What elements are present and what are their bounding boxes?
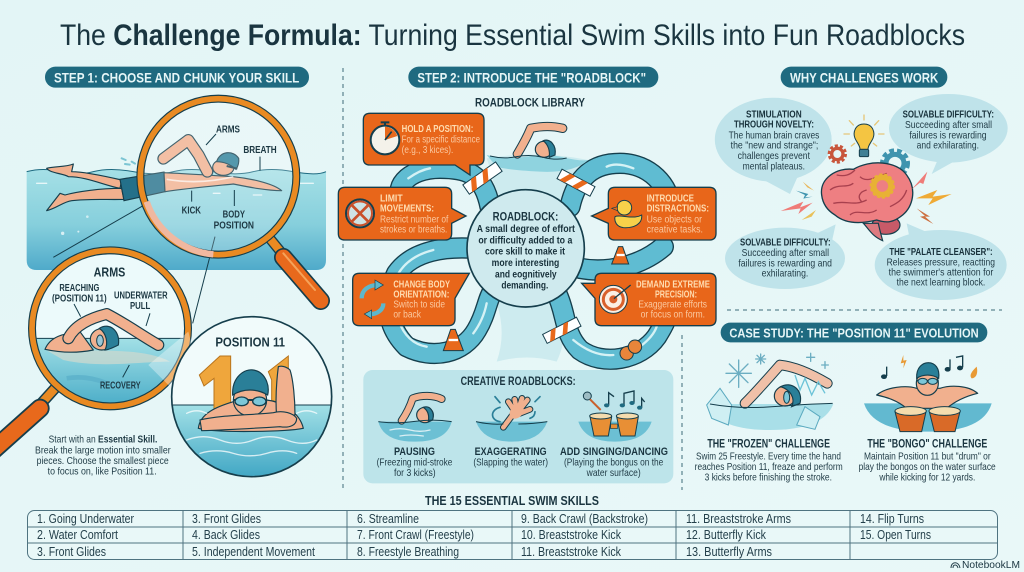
bubble: stimulation through novelty: The human brain craves [729,130,819,141]
heading: step 2 [408,67,658,88]
arms magnifier: ARMS [94,265,125,280]
callout: change body orientation [353,273,469,326]
icon: brain [821,163,913,241]
bubble: solvable difficulty bottom [725,224,845,289]
panel: step 1 choose and chunk [0,67,333,478]
central roadblock definition [467,190,584,307]
handle of large magnifier [268,237,321,301]
bubble: solvable difficulty bottom: exhilarating. [762,269,808,280]
barricades [463,162,595,343]
table: swim skills: 14. Flip Turns [860,512,924,526]
creative roadblocks heading: CREATIVE ROADBLOCKS: [461,375,576,388]
text: bongo challenge: THE "BONGO" CHALLENGE [867,437,988,450]
bubble: stimulation through novelty: the "new and strange"; [731,141,818,152]
callout: change body orientation: CHANGE BODY [393,280,450,291]
connector wedge [148,332,213,430]
arms magnifier: PULL [130,301,150,312]
icon: bongos and notes [578,391,652,442]
bubble: solvable difficulty bottom: failures is rewarding and [738,258,832,269]
callout: hold a position: HOLD A POSITION: [402,124,473,135]
icon: gears [829,146,908,176]
text: bongo challenge: play the bongos on the water surface [859,462,996,473]
bubble: stimulation through novelty [715,98,832,194]
table: swim skills: 11. Breaststroke Kick [521,545,622,559]
callout: introduce distractions: Use objects or [647,214,703,225]
heading: step 2: STEP 2: INTRODUCE THE "ROADBLOCK" [417,70,646,86]
arms magnifier: (POSITION 11) [52,293,107,304]
swimmer [37,140,313,235]
illustration: frozen swimmer [707,353,833,430]
callout: change body orientation: or back [393,310,421,321]
labels: exaggerating: EXAGGERATING [475,446,547,458]
callout: demand extreme precision: Exaggerate efforts [638,300,707,311]
icon: exaggerating hand [476,397,547,442]
labels: pausing: for 3 kicks) [394,468,436,479]
table: swim skills: 11. Breaststroke Arms [686,512,791,526]
callout: change body orientation: Switch to side [393,300,445,311]
callout: introduce distractions: INTRODUCE [647,194,694,205]
large magnifier lens: ARMS [216,124,240,135]
text: bongo challenge: Maintain Position 11 but "drum" or [864,452,991,463]
text: frozen challenge: 3 kicks before finishing the stroke. [705,472,832,483]
bubble: solvable difficulty top: Succeeding after small [905,120,992,131]
bubble: solvable difficulty top: failures is rewarding [909,130,987,141]
text: frozen challenge: Swim 25 Freestyle. Every time the hand [696,452,841,463]
text: frozen challenge: reaches Position 11, freaze and perform [695,462,843,473]
callout: introduce distractions: creative tasks. [647,224,703,235]
table: swim skills: 9. Back Crawl (Backstroke) [521,512,648,526]
bubble: palate cleanser: the next learning block. [897,278,985,289]
central roadblock definition: or difficulty added to a [478,235,573,246]
table: swim skills: 1. Going Underwater [37,512,134,526]
callout: introduce distractions: DISTRACTIONS: [647,204,709,215]
callout: demand extreme precision [582,273,716,326]
labels: add singing/dancing: water surface) [586,468,641,479]
bubble: stimulation through novelty: mental plateaus. [743,161,805,172]
labels: pausing [377,446,453,479]
panel: creative roadblocks [363,370,673,483]
central roadblock definition: more interesting [492,258,559,269]
text: bongo challenge: while kicking for 12 yards. [879,472,975,483]
panel: why challenges work [715,67,1008,300]
callout: limit movements: MOVEMENTS: [380,204,434,215]
callout: introduce distractions [592,187,716,240]
table: swim skills: 5. Independent Movement [192,545,315,559]
icon: pausing swimmer [378,396,452,442]
table: swim skills: 8. Freestyle Breathing [357,545,459,559]
table: swim skills: 7. Front Crawl (Freestyle) [357,528,474,542]
callout: change body orientation: ORIENTATION: [393,290,449,301]
bubble: palate cleanser: the swimmer's attention for [889,267,994,278]
step 1 body text: Start with an Essential Skill. [49,435,157,446]
step 1 body text [35,435,171,478]
heading: why challenges work [781,67,947,88]
text: frozen challenge [695,437,843,483]
callout: hold a position [363,113,484,175]
subheading: roadblock library: ROADBLOCK LIBRARY [475,96,585,110]
large magnifier lens: BREATH [243,145,277,156]
heading: case study [721,323,987,342]
table: swim skills: 13. Butterfly Arms [686,545,772,559]
large magnifier lens [140,99,296,255]
position 11 circle [170,317,333,478]
table: swim skills: 3. Front Glides [192,512,261,526]
step 1 body text: pieces. Choose the smallest piece [37,456,169,467]
central roadblock definition: core skill to make it [485,247,565,258]
table: swim skills: 3. Front Glides [37,545,106,559]
text: bongo challenge [859,437,996,483]
labels: add singing/dancing: ADD SINGING/DANCING [560,446,668,458]
callout: demand extreme precision: PRECISION: [655,290,697,301]
looping tube track [389,163,670,359]
table: swim skills [28,510,998,560]
labels: exaggerating [473,446,548,469]
text: frozen challenge: THE "FROZEN" CHALLENGE [707,437,830,450]
callout: limit movements: Restrict number of [380,214,449,225]
central water pool [487,155,588,362]
table: swim skills: 6. Streamline [357,512,419,526]
callout: limit movements: LIMIT [380,194,403,205]
bubble: palate cleanser: THE "PALATE CLEANSER": [889,247,993,258]
callout: demand extreme precision: DEMAND EXTREME [636,280,710,291]
labels: exaggerating: (Slapping the water) [473,458,548,469]
labels: pausing: (Freezing mid-stroke [377,458,453,469]
bubble: solvable difficulty top [889,94,1008,174]
panel: case study [695,323,996,483]
icon: lightbulb [844,115,884,157]
central roadblock definition: and eognitively [495,269,557,280]
arms magnifier [0,250,190,450]
bubble: solvable difficulty top: and exhilarating. [917,141,979,152]
step 1 body text: to focus on, like Position 11. [48,467,157,478]
table: swim skills: 4. Back Glides [192,528,260,542]
bubble: solvable difficulty bottom: Succeeding after small [742,248,829,259]
table: swim skills: 10. Breaststroke Kick [521,528,622,542]
bubble: solvable difficulty bottom: SOLVABLE DIFFICULTY: [740,238,831,249]
labels: add singing/dancing: (Playing the bongus on the [564,458,664,469]
central roadblock definition: ROADBLOCK: [493,210,558,224]
icon: lightning bolts [781,172,952,224]
callout: hold a position: (e.g., 3 kices). [402,145,453,156]
heading: step 1: STEP 1: CHOOSE AND CHUNK YOUR SKILL [54,70,300,86]
sight lines [53,202,215,323]
traffic cones [443,247,642,360]
heading: why challenges work: WHY CHALLENGES WORK [790,70,938,86]
bubble: palate cleanser [875,223,1007,300]
bubble: stimulation through novelty: challenges prevent [738,151,810,162]
large magnifier lens: BODY [223,210,245,221]
large magnifier lens: KICK [182,205,201,216]
title: The Challenge Formula: Turning Essential Swim Skills into Fun Roadblocks [60,19,965,52]
heading: step 1 [45,67,309,88]
position 11 circle: POSITION 11 [215,335,285,350]
heading: 15 essential swim skills: THE 15 ESSENTIAL SWIM SKILLS [425,494,599,508]
table: swim skills: 12. Butterfly Kick [686,528,767,542]
callout: hold a position: For a specific distance [402,134,480,145]
table: swim skills: 15. Open Turns [860,528,931,542]
table: swim skills: 2. Water Comfort [37,528,118,542]
notebooklm mark: NotebookLM [962,559,1020,571]
labels: pausing: PAUSING [394,446,435,458]
bubble: solvable difficulty top: SOLVABLE DIFFICULTY: [903,109,994,120]
bubble: stimulation through novelty: STIMULATION [746,109,802,120]
step 1 body text: Break the large motion into smaller [35,445,171,456]
central roadblock definition: A small degree of effort [477,224,575,235]
large magnifier lens: POSITION [214,220,254,231]
bubble: palate cleanser: Releases pressure, reactting [887,257,995,268]
arms magnifier: UNDERWATER [114,291,168,302]
arms magnifier: REACHING [59,283,99,294]
arms magnifier: RECOVERY [100,380,141,391]
labels: add singing/dancing [560,446,668,479]
callout: demand extreme precision: or focus on form. [641,310,705,321]
pool water [27,169,326,270]
central roadblock definition: demanding. [501,281,548,292]
bubble: stimulation through novelty: THROUGH NOVELTY: [734,119,814,130]
heading: case study: CASE STUDY: THE "POSITION 11" EVOLUTION [729,326,979,341]
panel: step 2 roadblock [338,67,716,362]
callout: limit movements: strokes or breaths. [380,224,447,235]
callout: limit movements [338,187,466,240]
illustration: bongo swimmer [864,355,992,432]
swimmer at top [487,127,588,172]
